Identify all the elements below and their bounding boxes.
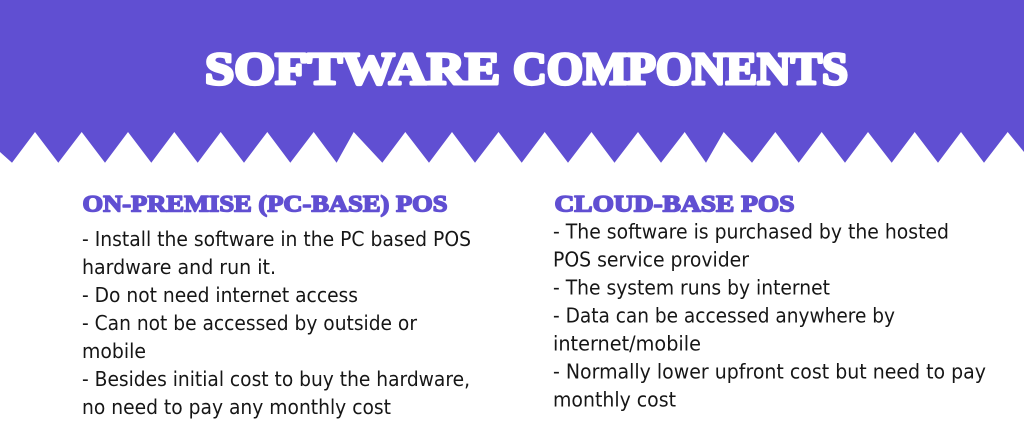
text block: cloud-base details: internet/mobile [553,332,701,356]
title: COMPONENTS [513,43,848,94]
heading: on-premise POS: ON-PREMISE (PC-BASE) POS [82,192,448,218]
text block: cloud-base details: - The system runs by internet [553,276,830,300]
title: SOFTWARE [205,43,500,94]
text block: on-premise details: - Install the software in the PC based POS [82,227,471,251]
text block: on-premise details: no need to pay any monthly cost [82,395,391,419]
text block: on-premise details [82,227,471,419]
heading: cloud-base POS: CLOUD-BASE POS [554,192,794,218]
text block: on-premise details: hardware and run it. [82,255,276,279]
text block: on-premise details: - Besides initial cost to buy the hardware, [82,367,470,391]
text block: cloud-base details: monthly cost [553,388,676,412]
text block: on-premise details: mobile [82,339,146,363]
title [205,43,848,94]
text block: cloud-base details: - The software is purchased by the hosted [553,220,949,244]
text block: on-premise details: - Do not need internet access [82,283,358,307]
text block: cloud-base details: - Normally lower upfront cost but need to pay [553,360,986,384]
text block: cloud-base details: - Data can be accessed anywhere by [553,304,895,328]
panel: cloud-base POS [553,192,986,412]
panel: on-premise POS [82,192,471,419]
header banner with zigzag edge [0,0,1024,163]
text block: on-premise details: - Can not be accessed by outside or [82,311,418,335]
text block: cloud-base details: POS service provider [553,248,750,272]
text block: cloud-base details [553,220,986,412]
